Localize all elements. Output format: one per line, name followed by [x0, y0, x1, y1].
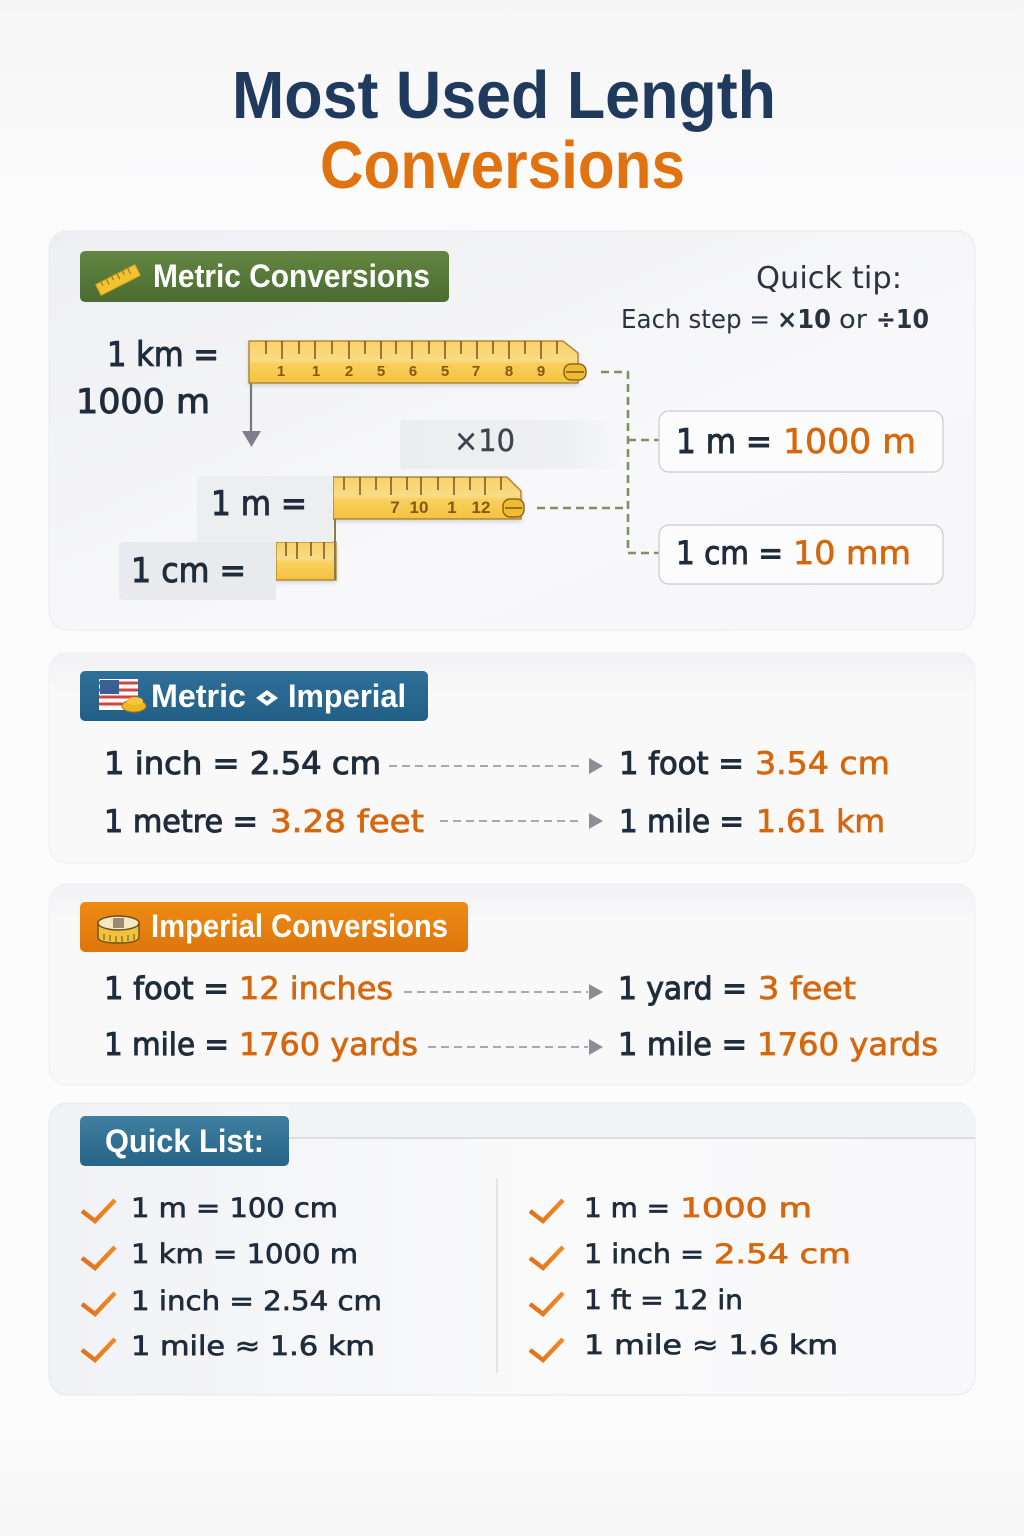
label: 1 km = 1000 m: [76, 335, 219, 422]
header: metric imperial: Imperial: [288, 678, 406, 714]
label: x10 band: ×10: [454, 424, 515, 459]
panel: imperial conversions: [49, 884, 975, 1085]
quick tip: or: [839, 305, 867, 335]
label: x10 band: [400, 420, 626, 469]
ruler: m: 7: [390, 498, 400, 517]
box: 1 m = 1000 m: 1000 m: [783, 422, 916, 462]
ruler: km: 1: [277, 363, 285, 380]
row: foot and yard: 3 feet: [758, 971, 856, 1007]
row: inch and foot: 3.54 cm: [755, 746, 890, 782]
arrow: down: [242, 383, 261, 447]
ruler: m: 10: [410, 498, 428, 517]
row: inch and foot: 1 inch = 2.54 cm: [104, 746, 381, 782]
item: 1 km = 1000 m: [131, 1239, 358, 1270]
title: Most Used Length: [232, 58, 776, 133]
ruler: m: [333, 477, 524, 580]
header: metric imperial: Metric: [151, 678, 246, 714]
label: 1 m =: 1 m =: [211, 484, 307, 524]
label: 1 cm =: [119, 542, 276, 600]
item: 1 inch =: [584, 1239, 704, 1270]
item: 1 mile ≈ 1.6 km: [584, 1330, 838, 1361]
box: 1 cm = 10 mm: 10 mm: [793, 534, 911, 572]
panel: metric to imperial: [49, 653, 975, 863]
check: [530, 1200, 563, 1221]
row: foot and yard: 12 inches: [239, 971, 393, 1007]
icon: ruler: [96, 265, 140, 295]
ruler: km: 2: [345, 363, 353, 380]
item: 1 m = 100 cm: [131, 1193, 338, 1224]
row: mile and yards: 1 mile =: [104, 1027, 229, 1063]
icon: tape measure: [98, 916, 139, 943]
title: Conversions: [320, 128, 685, 203]
header: quick list: Quick List:: [105, 1123, 264, 1159]
item: 1 inch = 2.54 cm: [131, 1286, 382, 1317]
icon: double arrow: [256, 690, 278, 706]
icon: flag and tape: [99, 679, 146, 712]
quick tip: ×10: [777, 305, 831, 335]
quick tip: [621, 261, 929, 335]
row: metre and mile: 3.28 feet: [270, 804, 424, 840]
item: 2.54 cm: [714, 1239, 851, 1270]
header: imperial conversions: Imperial Conversions: [151, 908, 448, 944]
box: 1 cm = 10 mm: [659, 525, 943, 584]
row: metre and mile: 1.61 km: [756, 804, 885, 840]
row: foot and yard: 1 yard =: [618, 971, 747, 1007]
item: 1 ft = 12 in: [584, 1285, 743, 1316]
header: metric conversions: Metric Conversions: [153, 258, 430, 294]
header: metric conversions: [80, 251, 449, 302]
row: metre and mile: 1 metre =: [104, 804, 258, 840]
label: 1 m =: [197, 476, 333, 542]
quick tip: Quick tip:: [756, 261, 902, 296]
row: mile and yards: [104, 1027, 938, 1063]
header: imperial conversions: [80, 902, 468, 952]
row: foot and yard: 1 foot =: [104, 971, 229, 1007]
header: metric imperial: [80, 671, 428, 721]
check: [530, 1293, 563, 1314]
ruler: km: 7: [472, 363, 480, 380]
connector: green dashed lines: [537, 372, 659, 553]
row: foot and yard: [104, 971, 856, 1007]
check: [82, 1200, 115, 1221]
ruler: km: 5: [441, 363, 449, 380]
check: [82, 1247, 115, 1268]
row: inch and foot: 1 foot =: [619, 746, 744, 782]
item: 1 mile ≈ 1.6 km: [131, 1331, 375, 1362]
item: 1 m =: [584, 1193, 670, 1224]
label: 1 km = 1000 m: 1000 m: [76, 382, 210, 422]
header: quick list: [80, 1116, 289, 1166]
quick tip: ÷10: [876, 305, 929, 335]
check: [530, 1339, 563, 1360]
box: 1 cm = 10 mm: 1 cm =: [676, 534, 783, 572]
ruler: km: 6: [409, 363, 417, 380]
box: 1 m = 1000 m: 1 m =: [676, 422, 772, 462]
check: [82, 1339, 115, 1360]
row: mile and yards: 1760 yards: [239, 1027, 418, 1063]
ruler: km: [249, 341, 586, 383]
row: metre and mile: [104, 804, 885, 840]
check: [82, 1293, 115, 1314]
box: 1 m = 1000 m: [659, 411, 943, 472]
ruler: km: 1: [312, 363, 320, 380]
list: right column: [530, 1193, 851, 1361]
ruler: cm: [276, 542, 336, 580]
ruler: m: 1: [447, 498, 457, 517]
ruler: m: 12: [472, 498, 490, 517]
row: metre and mile: 1 mile =: [619, 804, 744, 840]
ruler: km: 9: [537, 363, 545, 380]
label: 1 km = 1000 m: 1 km =: [107, 335, 219, 375]
title: [232, 58, 776, 203]
panel: quick list: [49, 1103, 975, 1395]
list: left column: [82, 1193, 382, 1362]
row: mile and yards: 1 mile =: [618, 1027, 747, 1063]
panel: metric conversions: [49, 231, 975, 630]
check: [530, 1247, 563, 1268]
row: mile and yards: 1760 yards: [757, 1027, 938, 1063]
ruler: km: 8: [505, 363, 513, 380]
item: 1000 m: [680, 1193, 812, 1224]
quick tip: Each step =: [621, 305, 770, 335]
label: 1 cm =: 1 cm =: [131, 551, 246, 591]
row: inch and foot: [104, 746, 890, 782]
ruler: km: 5: [377, 363, 385, 380]
